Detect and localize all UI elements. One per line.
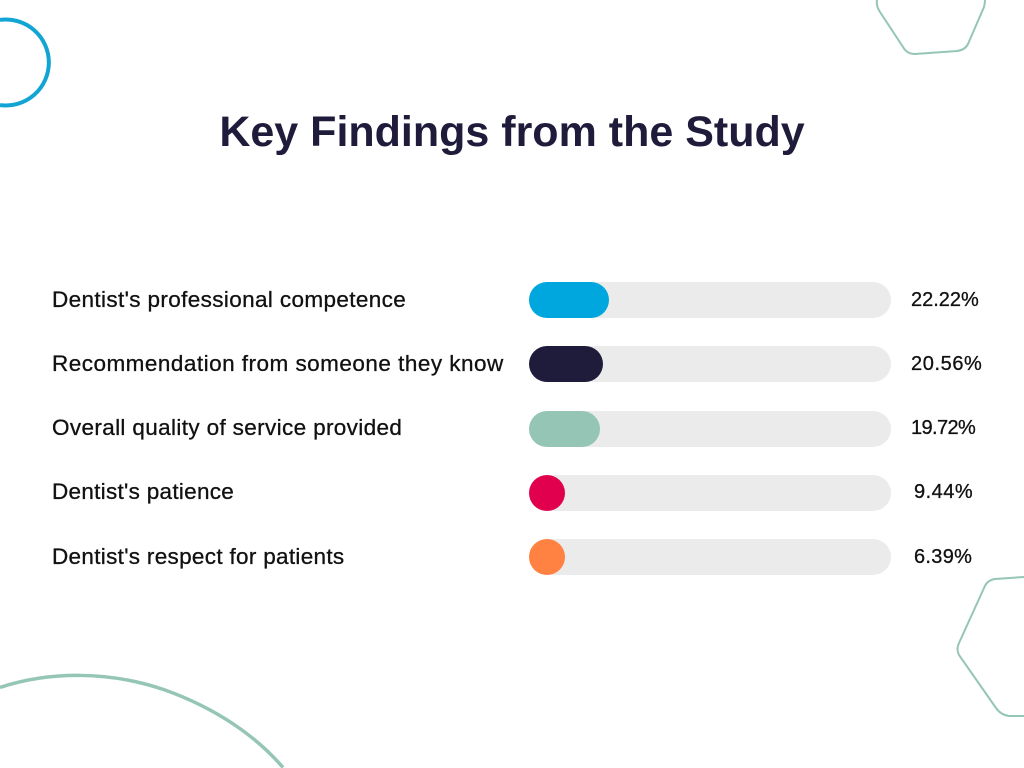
circle top left <box>0 19 49 105</box>
value: quality: 19.72% <box>911 417 975 439</box>
bar: patience <box>529 475 891 511</box>
value: competence: 22.22% <box>911 289 979 311</box>
label: respect: Dentist's respect for patients <box>52 544 344 569</box>
arc bottom left <box>0 675 283 768</box>
bar: respect <box>529 539 891 575</box>
hexagon top right <box>877 0 985 54</box>
bar: quality <box>529 411 891 447</box>
title: Key Findings from the Study <box>219 108 805 156</box>
label: quality: Overall quality of service provided <box>52 415 402 440</box>
value: recommendation: 20.56% <box>911 353 982 375</box>
bar: competence <box>529 282 891 318</box>
value: patience: 9.44% <box>914 481 973 503</box>
hexagon bottom right <box>958 577 1024 716</box>
bar: recommendation <box>529 346 891 382</box>
label: recommendation: Recommendation from someone they know <box>52 351 504 376</box>
label: competence: Dentist's professional competence <box>52 287 406 312</box>
value: respect: 6.39% <box>914 546 972 568</box>
label: patience: Dentist's patience <box>52 479 234 504</box>
